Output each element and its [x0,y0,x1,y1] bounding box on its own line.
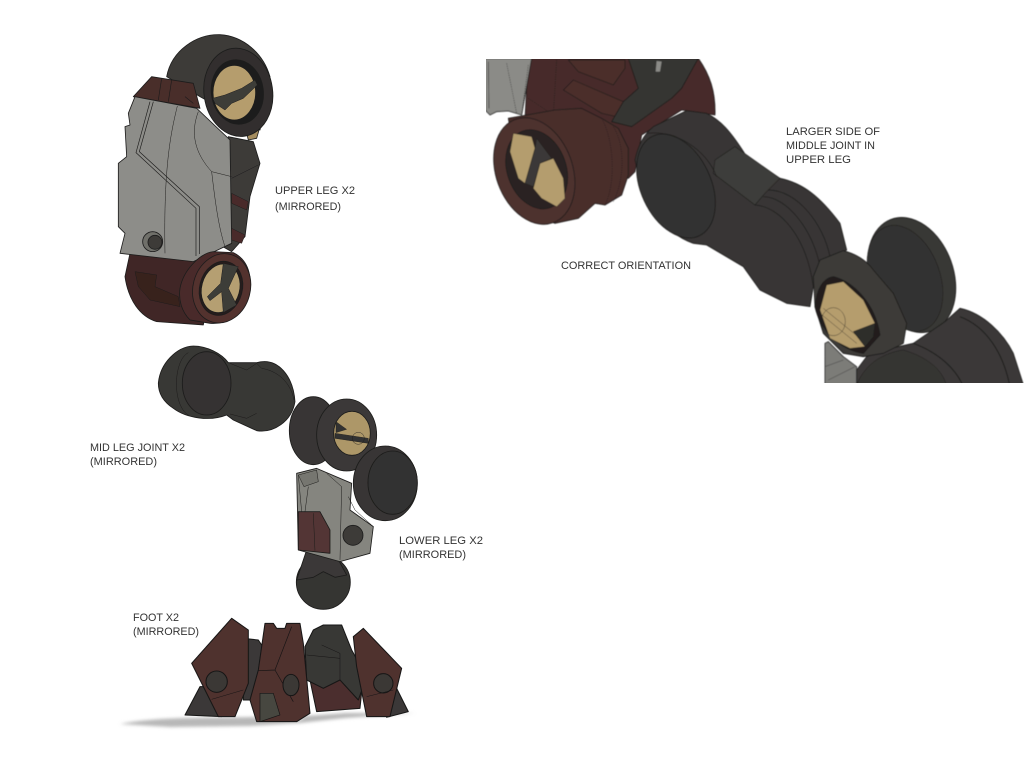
label: lower leg x2: LOWER LEG X2 [399,535,483,547]
label: upper leg x2: UPPER LEG X2 [275,185,355,197]
label: larger side of middle joint in upper leg [786,126,880,166]
label: mid leg joint x2: (MIRRORED) [90,456,157,468]
lower leg: back disc [289,397,337,465]
upper leg: right dark armour [217,137,260,252]
foot: left dark wedge [185,687,222,717]
foot: right brown panel [353,628,402,717]
close-up: mid leg joint capsule [621,111,847,307]
label: mid leg joint x2 [90,442,185,468]
upper leg: small gold tab [247,127,260,140]
lower leg: brown panel [298,512,330,553]
figure: foot [185,618,408,722]
label: mid leg joint x2: MID LEG JOINT X2 [90,442,185,454]
close-up: rear lower disc [868,216,957,334]
lower leg: ball foot joint [296,555,350,609]
close-up: dark central armour [612,58,698,127]
label: foot x2: FOOT X2 [133,612,179,624]
foot: left brown panel [192,618,248,717]
close-up: lower joint cluster [813,205,1024,387]
lower leg: front ring with gold ball [317,399,377,471]
foot: center brown panel [250,623,310,722]
close-up: brown rear ball and body [525,58,715,178]
close-up: gray fragment [825,342,857,387]
label: foot x2 [133,612,199,638]
label: lower leg x2: (MIRRORED) [399,549,466,561]
lower leg: right disc [353,446,417,521]
foot: rear center [243,625,367,712]
close-up: lower bulk [857,308,1024,387]
close-up: socket assembly [480,58,715,236]
close-up: brown pieces and tabs [554,60,557,108]
lower leg: hole [343,525,363,545]
upper leg: top ring with gold ball [198,44,278,141]
mid joint: left front disc [182,352,231,415]
label: upper leg x2: (MIRRORED) [275,201,341,213]
lower leg: gray plate [297,468,373,562]
figure: upper leg [118,35,278,330]
upper leg: lower brown ball [125,253,217,325]
figure: lower leg [289,397,417,609]
foot ground shadow [120,713,415,727]
foot: right dark wedge [383,685,408,717]
mid joint: capsule body [158,346,295,431]
label: foot x2: (MIRRORED) [133,626,199,638]
label: larger side of middle joint in upper leg: UPPER LEG [786,154,851,166]
label: larger side of middle joint in upper leg: MIDDLE JOINT IN [786,140,875,152]
lower leg: neck [297,550,347,580]
label: lower leg x2 [399,535,483,561]
upper leg: top dark ball [167,35,270,130]
close-up: brown cylinder socket [492,108,629,226]
figure: mid leg joint [158,346,295,431]
close-up: front ring with gold ball [813,251,907,357]
upper leg: top brown armour [133,77,200,108]
figure: correct orientation close-up [480,58,1024,387]
label: upper leg x2 [275,185,355,213]
close-up: gray plate corner [485,58,532,115]
upper leg: bolt hole [143,232,163,252]
upper leg: gray plate [118,97,232,262]
upper leg: bottom ring with gold ball [180,247,258,330]
label: correct orientation: CORRECT ORIENTATION [561,260,691,272]
label: larger side of middle joint in upper leg: LARGER SIDE OF [786,126,880,138]
